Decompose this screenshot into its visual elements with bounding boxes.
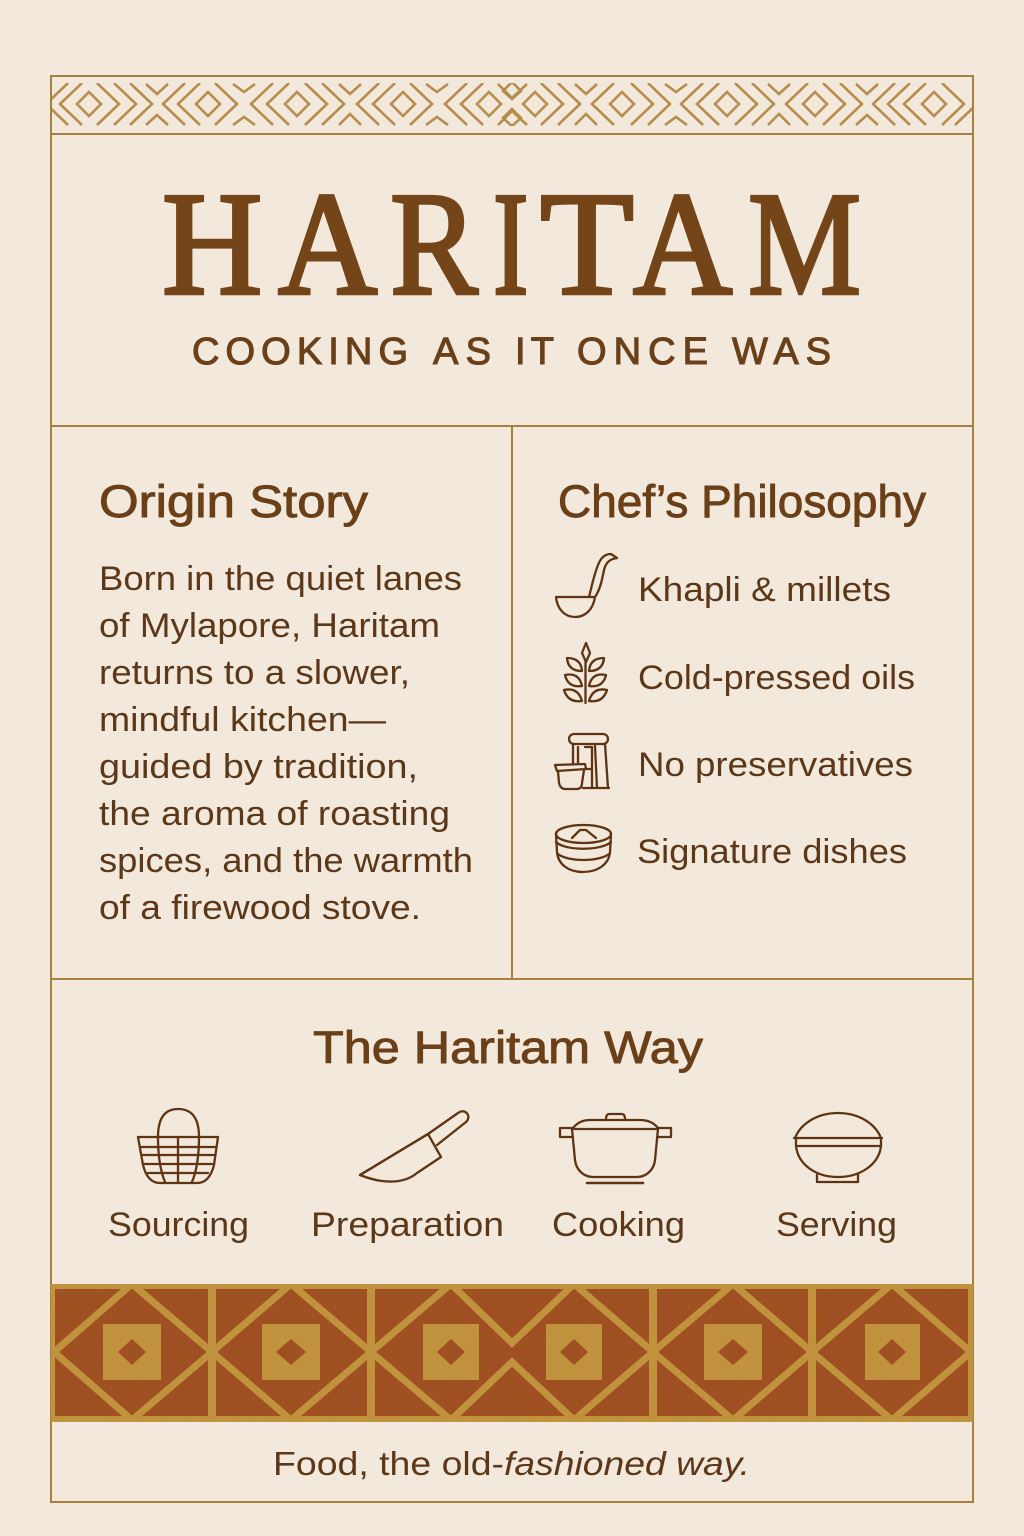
icon: mixer and cup xyxy=(555,734,609,789)
icon: ladle xyxy=(556,554,617,617)
text block: origin story body: mindful kitchen— xyxy=(99,701,386,739)
title xyxy=(162,161,861,326)
patterned terracotta band xyxy=(51,1284,973,1422)
top ornamental border xyxy=(46,82,977,126)
subtitle: ONCE xyxy=(577,331,708,373)
label: serving: Serving xyxy=(776,1206,897,1244)
tagline: Food, the old- xyxy=(273,1445,504,1482)
subtitle: COOKING xyxy=(192,331,408,373)
panel: the haritam way xyxy=(108,1022,897,1244)
label: signature dishes: Signature dishes xyxy=(637,833,907,871)
label: preparation: Preparation xyxy=(311,1206,504,1244)
heading: origin story: Origin Story xyxy=(99,476,369,527)
title: T xyxy=(540,161,634,326)
text block: origin story body: Born in the quiet lanes xyxy=(99,560,462,598)
heading: the haritam way: The Haritam Way xyxy=(313,1022,704,1073)
text block: origin story body xyxy=(99,560,473,927)
tagline xyxy=(273,1445,750,1482)
text block: origin story body: of Mylapore, Haritam xyxy=(99,607,440,645)
label: cold-pressed oils: Cold-pressed oils xyxy=(638,659,915,697)
icon: wheat xyxy=(564,643,607,703)
title: A xyxy=(278,162,377,326)
icon: basket xyxy=(138,1109,218,1183)
text block: origin story body: the aroma of roasting xyxy=(99,795,450,833)
title: A xyxy=(633,162,732,326)
icon: bowl of grain xyxy=(556,825,611,872)
label: khapli and millets: Khapli & millets xyxy=(638,571,891,609)
label: sourcing: Sourcing xyxy=(108,1206,249,1244)
subtitle xyxy=(192,331,831,373)
panel: origin story xyxy=(99,476,473,927)
text block: origin story body: guided by tradition, xyxy=(99,748,418,786)
label: cooking: Cooking xyxy=(552,1206,685,1244)
subtitle: IT xyxy=(515,331,554,373)
subtitle: WAS xyxy=(732,331,831,373)
title: I xyxy=(493,162,528,326)
text block: origin story body: of a firewood stove. xyxy=(99,889,421,927)
icon: cooking pot xyxy=(560,1114,671,1183)
tagline: fashioned way. xyxy=(504,1445,750,1482)
title: M xyxy=(748,162,861,326)
text block: origin story body: spices, and the warmth xyxy=(99,842,473,880)
title: H xyxy=(162,163,262,326)
heading: chef's philosophy: Chef’s Philosophy xyxy=(558,476,927,527)
title: R xyxy=(390,163,478,326)
text block: origin story body: returns to a slower, xyxy=(99,654,410,692)
icon: knife xyxy=(360,1111,468,1182)
panel: chef's philosophy xyxy=(555,476,927,872)
icon: serving bowl xyxy=(794,1113,882,1182)
label: no preservatives: No preservatives xyxy=(638,746,913,784)
subtitle: AS xyxy=(433,331,491,373)
